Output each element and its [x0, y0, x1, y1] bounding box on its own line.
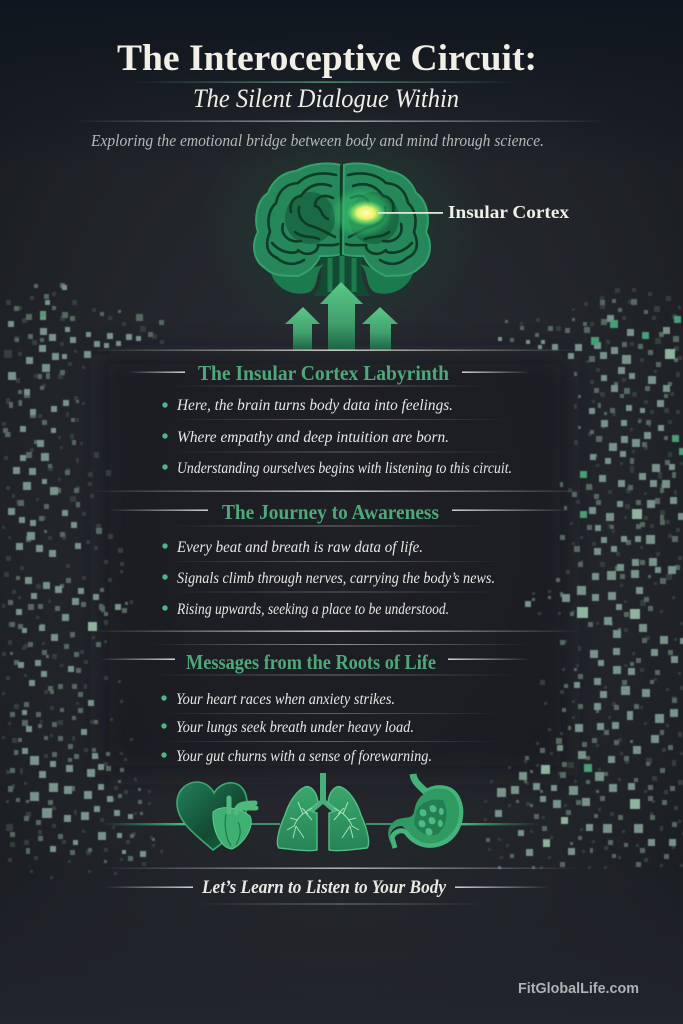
- bullet list: [161, 691, 432, 765]
- brain stem: [314, 252, 370, 296]
- right arrow: [362, 307, 398, 350]
- panel: the insular cortex labyrinth: [90, 350, 580, 477]
- center arrow: [320, 282, 363, 350]
- title underline: [130, 82, 520, 83]
- bullet list: Signals climb through nerves, carrying the body’s news.: [177, 570, 495, 587]
- bullet list: Where empathy and deep intuition are born.: [177, 429, 449, 446]
- leader line to label: [378, 212, 443, 214]
- anatomical heart: [213, 798, 256, 849]
- icon: heart: [177, 782, 256, 850]
- cerebellum lobes: [270, 264, 324, 294]
- icon: stomach: [388, 774, 461, 848]
- organ connector line: [100, 823, 540, 825]
- arrows rising to the brain: [285, 282, 398, 350]
- heading: Messages from the Roots of Life: [186, 650, 436, 674]
- bullet list: Every beat and breath is raw data of life.: [176, 539, 423, 556]
- heading: The Journey to Awareness: [222, 500, 439, 524]
- particle field: data squares: [2, 283, 683, 879]
- panel: the journey to awareness: [90, 490, 590, 618]
- bullet list: Your heart races when anxiety strikes.: [176, 691, 395, 708]
- panel: messages from the roots of life: [90, 630, 580, 765]
- right hemisphere: [343, 163, 430, 276]
- tagline: Exploring the emotional bridge between body and mind through science.: [90, 131, 544, 150]
- bullet list: Here, the brain turns body data into feelings.: [176, 397, 453, 414]
- subtitle: The Silent Dialogue Within: [193, 84, 459, 113]
- bullet list: Your lungs seek breath under heavy load.: [176, 719, 414, 736]
- website credit: FitGlobalLife.com: [518, 980, 639, 997]
- bullet list: [162, 397, 512, 477]
- heading: The Insular Cortex Labyrinth: [198, 361, 449, 385]
- icon: brain with insular cortex highlight: [254, 163, 430, 296]
- bullet list: Rising upwards, seeking a place to be understood.: [176, 601, 449, 618]
- bullet list: Understanding ourselves begins with listening to this circuit.: [177, 460, 512, 477]
- closing text: Let’s Learn to Listen to Your Body: [201, 877, 447, 898]
- bullet list: Your gut churns with a sense of forewarning.: [176, 748, 432, 765]
- left arrow: [285, 307, 320, 350]
- subtitle divider: [70, 120, 610, 122]
- insula glow: [334, 191, 390, 235]
- icon: lungs: [277, 773, 369, 851]
- label: insular cortex: Insular Cortex: [448, 202, 569, 222]
- left hemisphere: [254, 163, 341, 276]
- main title: The Interoceptive Circuit:: [117, 38, 537, 79]
- bullet list: [162, 539, 495, 618]
